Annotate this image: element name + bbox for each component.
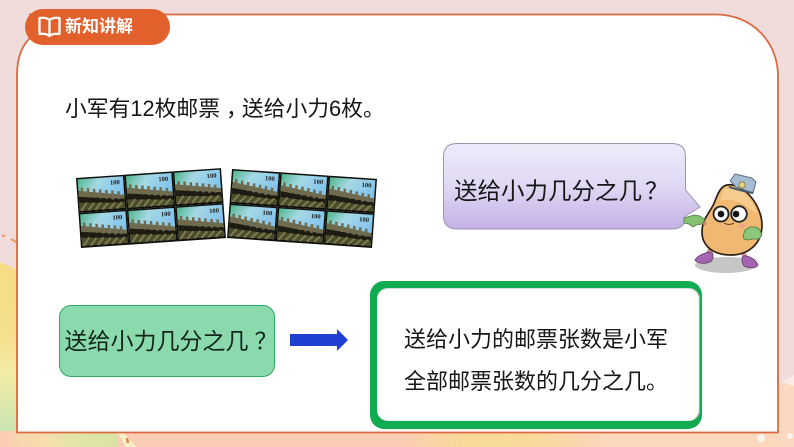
stamp sheet left: 100 bbox=[161, 211, 172, 218]
stamp sheet right: 100 bbox=[311, 213, 321, 221]
stamp sheet left: 100 bbox=[206, 172, 217, 180]
heading badge bbox=[25, 9, 170, 45]
stamp sheet left: 100 bbox=[158, 176, 169, 183]
stamp sheet left: 100 bbox=[209, 207, 220, 215]
problem statement: 小军有12枚邮票 ，送给小力6枚。 bbox=[65, 96, 385, 121]
stamp sheet right: 100 bbox=[265, 175, 275, 183]
answer box bbox=[370, 281, 702, 429]
stamp sheet left bbox=[76, 168, 226, 248]
stamp sheet left: 100 bbox=[110, 179, 121, 187]
icon: open book bbox=[38, 16, 61, 38]
stamp sheet right: 100 bbox=[262, 210, 273, 217]
stamp sheet right: 100 bbox=[313, 179, 323, 186]
answer text: 送给小力的邮票张数是小军 bbox=[404, 327, 668, 352]
speech bubble text: 送给小力几分之几？ bbox=[454, 178, 668, 204]
stamp sheet left: 100 bbox=[112, 214, 123, 222]
icon: potato mascot bbox=[684, 174, 763, 273]
answer inner panel bbox=[377, 288, 700, 421]
heading text: 新知讲解 bbox=[65, 17, 133, 36]
stamp sheet right bbox=[227, 169, 377, 248]
stamp sheet right: 100 bbox=[361, 182, 372, 189]
question box bbox=[59, 305, 275, 377]
stamp sheet right: 100 bbox=[359, 216, 369, 224]
arrow bbox=[290, 329, 348, 351]
question text: 送给小力几分之几 ？ bbox=[64, 328, 278, 354]
answer text bbox=[404, 327, 668, 394]
answer text: 全部邮票张数的几分之几。 bbox=[404, 369, 668, 394]
